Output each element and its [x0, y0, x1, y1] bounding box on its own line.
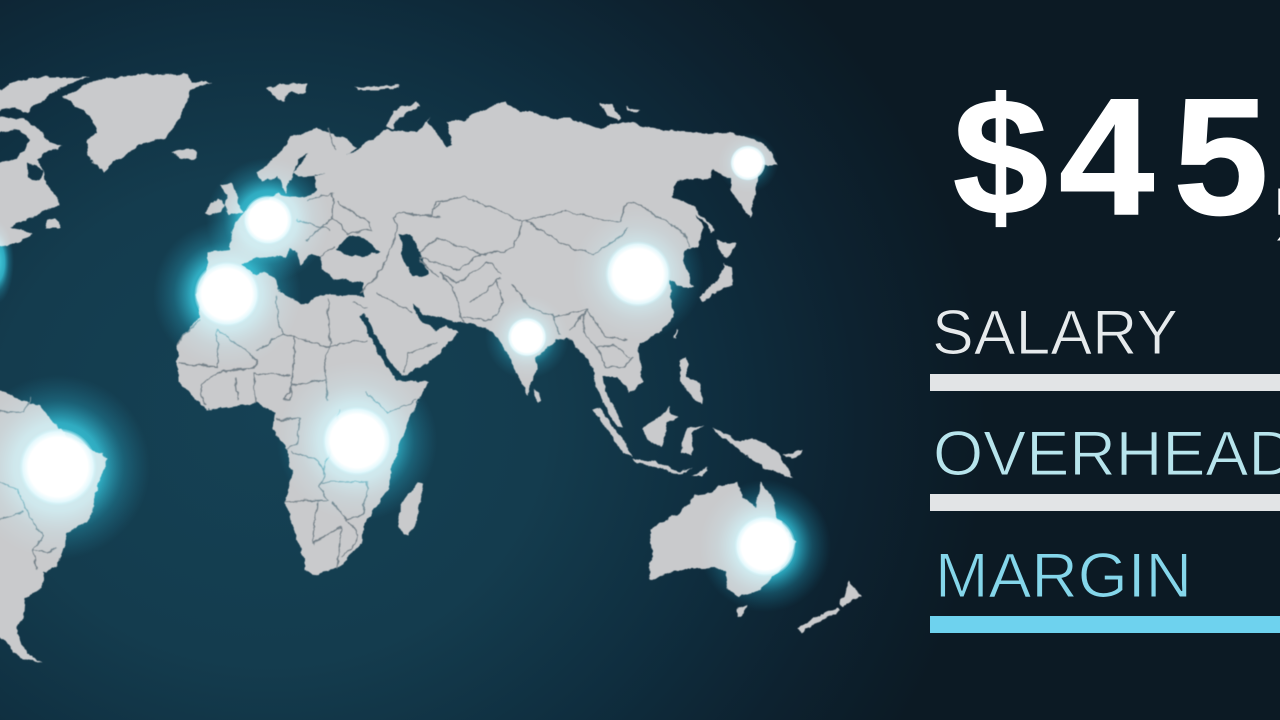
Australia — [648, 482, 795, 597]
Sri Lanka — [533, 390, 542, 403]
glow: Australia — [699, 480, 831, 612]
Sakhalin — [693, 207, 715, 232]
Britain — [220, 183, 243, 215]
New Guinea — [713, 427, 793, 477]
bar: overhead — [930, 494, 1280, 511]
Java — [632, 458, 693, 475]
glow: East Africa — [277, 361, 437, 521]
Borneo — [642, 408, 677, 448]
glow: Europe — [206, 158, 330, 282]
label: salary: SALARY — [932, 298, 1178, 368]
glow: China — [572, 208, 704, 340]
country borders — [0, 128, 690, 570]
Taiwan — [673, 328, 678, 339]
label: overhead: OVERHEAD — [933, 419, 1280, 489]
Franz Josef Land — [355, 84, 400, 90]
Canadian Arctic islands — [0, 77, 90, 112]
breakdown: overhead — [930, 419, 1280, 511]
Madagascar — [398, 483, 423, 537]
world map — [0, 74, 862, 663]
Sulawesi — [680, 425, 703, 455]
breakdown: margin — [930, 541, 1280, 633]
Eurasia and Africa — [177, 102, 778, 575]
Ireland — [205, 198, 225, 215]
Hokkaido — [717, 240, 737, 258]
glow: North Africa — [153, 220, 301, 368]
Severnaya Zemlya — [600, 104, 640, 121]
bar: salary — [930, 374, 1280, 391]
Iceland — [172, 148, 198, 160]
North America — [0, 117, 62, 247]
Japan — [700, 263, 733, 303]
South America — [0, 387, 108, 663]
New Zealand — [797, 580, 862, 633]
Svalbard — [267, 84, 307, 102]
Newfoundland — [45, 217, 62, 228]
bar: margin — [930, 616, 1280, 633]
Tasmania — [735, 605, 747, 617]
Timor — [692, 468, 708, 475]
Philippines — [680, 358, 703, 405]
Greenland — [62, 74, 213, 172]
glow: Far East Russia — [718, 133, 778, 193]
glow: Brazil — [0, 375, 150, 559]
breakdown: salary — [930, 298, 1280, 391]
Sumatra — [593, 408, 632, 457]
label: margin: MARGIN — [935, 541, 1192, 611]
glow: India — [485, 295, 569, 379]
Novaya Zemlya — [387, 102, 420, 128]
land masses — [0, 74, 862, 663]
glow: Central America edge — [0, 220, 14, 304]
Solomon Islands — [783, 450, 803, 458]
